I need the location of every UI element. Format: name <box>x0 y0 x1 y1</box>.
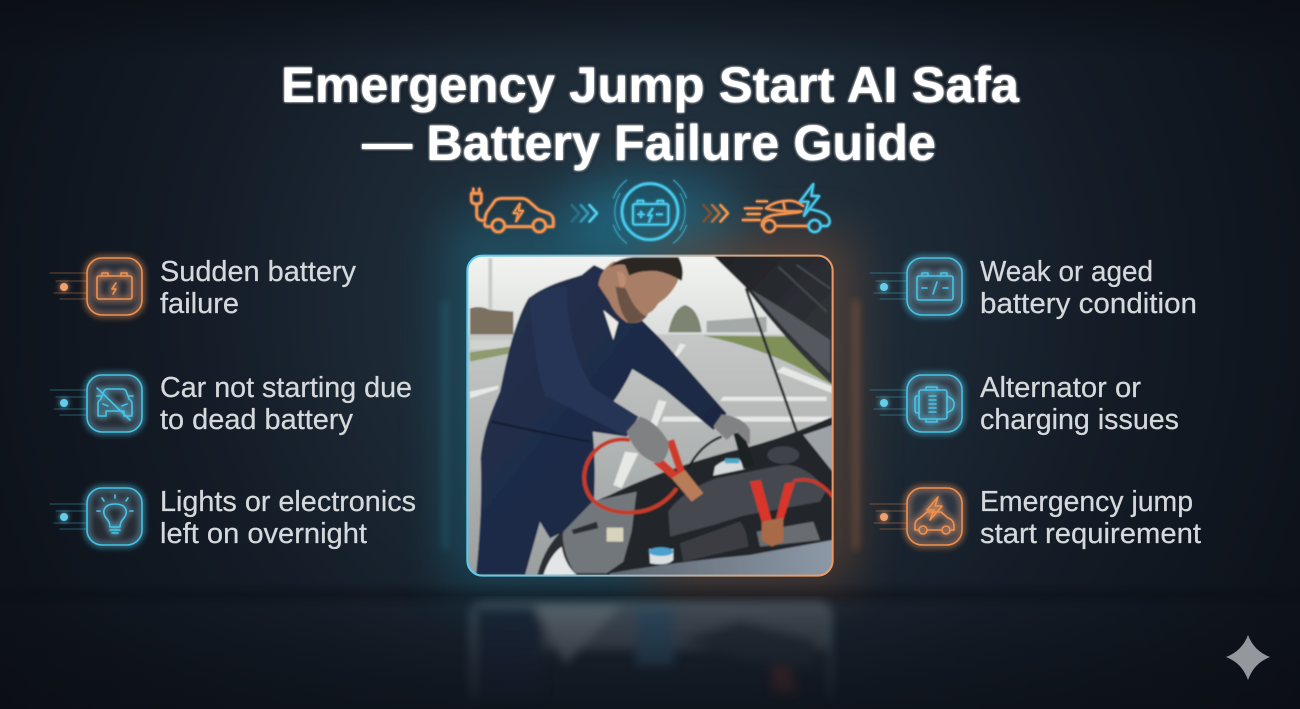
text: weak battery <box>980 256 1197 320</box>
title: — Battery Failure Guide <box>362 114 936 171</box>
process icon strip <box>471 180 830 243</box>
mechanic: coverall <box>476 265 727 575</box>
text: weak battery: Weak or aged <box>980 256 1153 288</box>
icon: chevrons right <box>703 205 728 222</box>
icon: crossed car <box>50 375 142 432</box>
right item 3: emergency jump start <box>870 486 1201 550</box>
icon: plugged-in electric car <box>471 189 553 232</box>
icon: battery with bolt <box>50 258 142 315</box>
left item 1: sudden battery failure <box>50 256 357 320</box>
title <box>281 56 1020 171</box>
icon: sparkle watermark <box>1226 635 1270 680</box>
icon: chevrons left <box>572 205 597 222</box>
text: alternator <box>980 372 1179 436</box>
icon: weak battery <box>870 258 962 315</box>
icon: speeding car with bolt <box>743 184 830 232</box>
text: lights left on: Lights or electronics <box>160 486 416 518</box>
photo scene: road backdrop <box>467 256 833 578</box>
mechanic: shirt <box>603 310 618 340</box>
text: lights left on <box>160 486 416 550</box>
left item 3: lights left on <box>50 486 416 550</box>
right item 2: alternator <box>870 372 1179 436</box>
text: weak battery: battery condition <box>980 288 1197 320</box>
text: car not starting: to dead battery <box>160 404 354 436</box>
left item 2: car not starting <box>50 372 412 436</box>
photo scene: engine bay <box>537 417 833 578</box>
right item 1: weak battery <box>870 256 1197 320</box>
photo scene: raised hood <box>713 256 833 432</box>
text: car not starting: Car not starting due <box>160 372 412 404</box>
mechanic: near arm highlight <box>528 287 638 437</box>
text: emergency jump start <box>980 486 1201 550</box>
photo scene: mechanic <box>476 257 727 575</box>
text: alternator: Alternator or <box>980 372 1142 404</box>
icon: alternator <box>870 375 962 432</box>
text: car not starting <box>160 372 412 436</box>
photo frame <box>467 256 833 576</box>
title: Emergency Jump Start AI Safa <box>281 56 1020 113</box>
text: sudden battery failure <box>160 256 357 320</box>
text: lights left on: left on overnight <box>160 518 367 550</box>
reflection of photo <box>472 604 830 700</box>
text: emergency jump start: start requirement <box>980 518 1201 550</box>
text: alternator: charging issues <box>980 404 1179 436</box>
text: emergency jump start: Emergency jump <box>980 486 1193 518</box>
mechanic: head and hair <box>598 262 678 323</box>
icon: car with bolt <box>870 488 962 545</box>
icon: light bulb <box>50 488 142 545</box>
text: sudden battery failure: Sudden battery <box>160 256 357 288</box>
text: sudden battery failure: failure <box>160 288 239 320</box>
photo: mechanic connecting jumper cables <box>467 256 833 578</box>
photo scene: jumper cables and gloves <box>584 414 833 547</box>
icon: central battery ring <box>613 180 687 243</box>
